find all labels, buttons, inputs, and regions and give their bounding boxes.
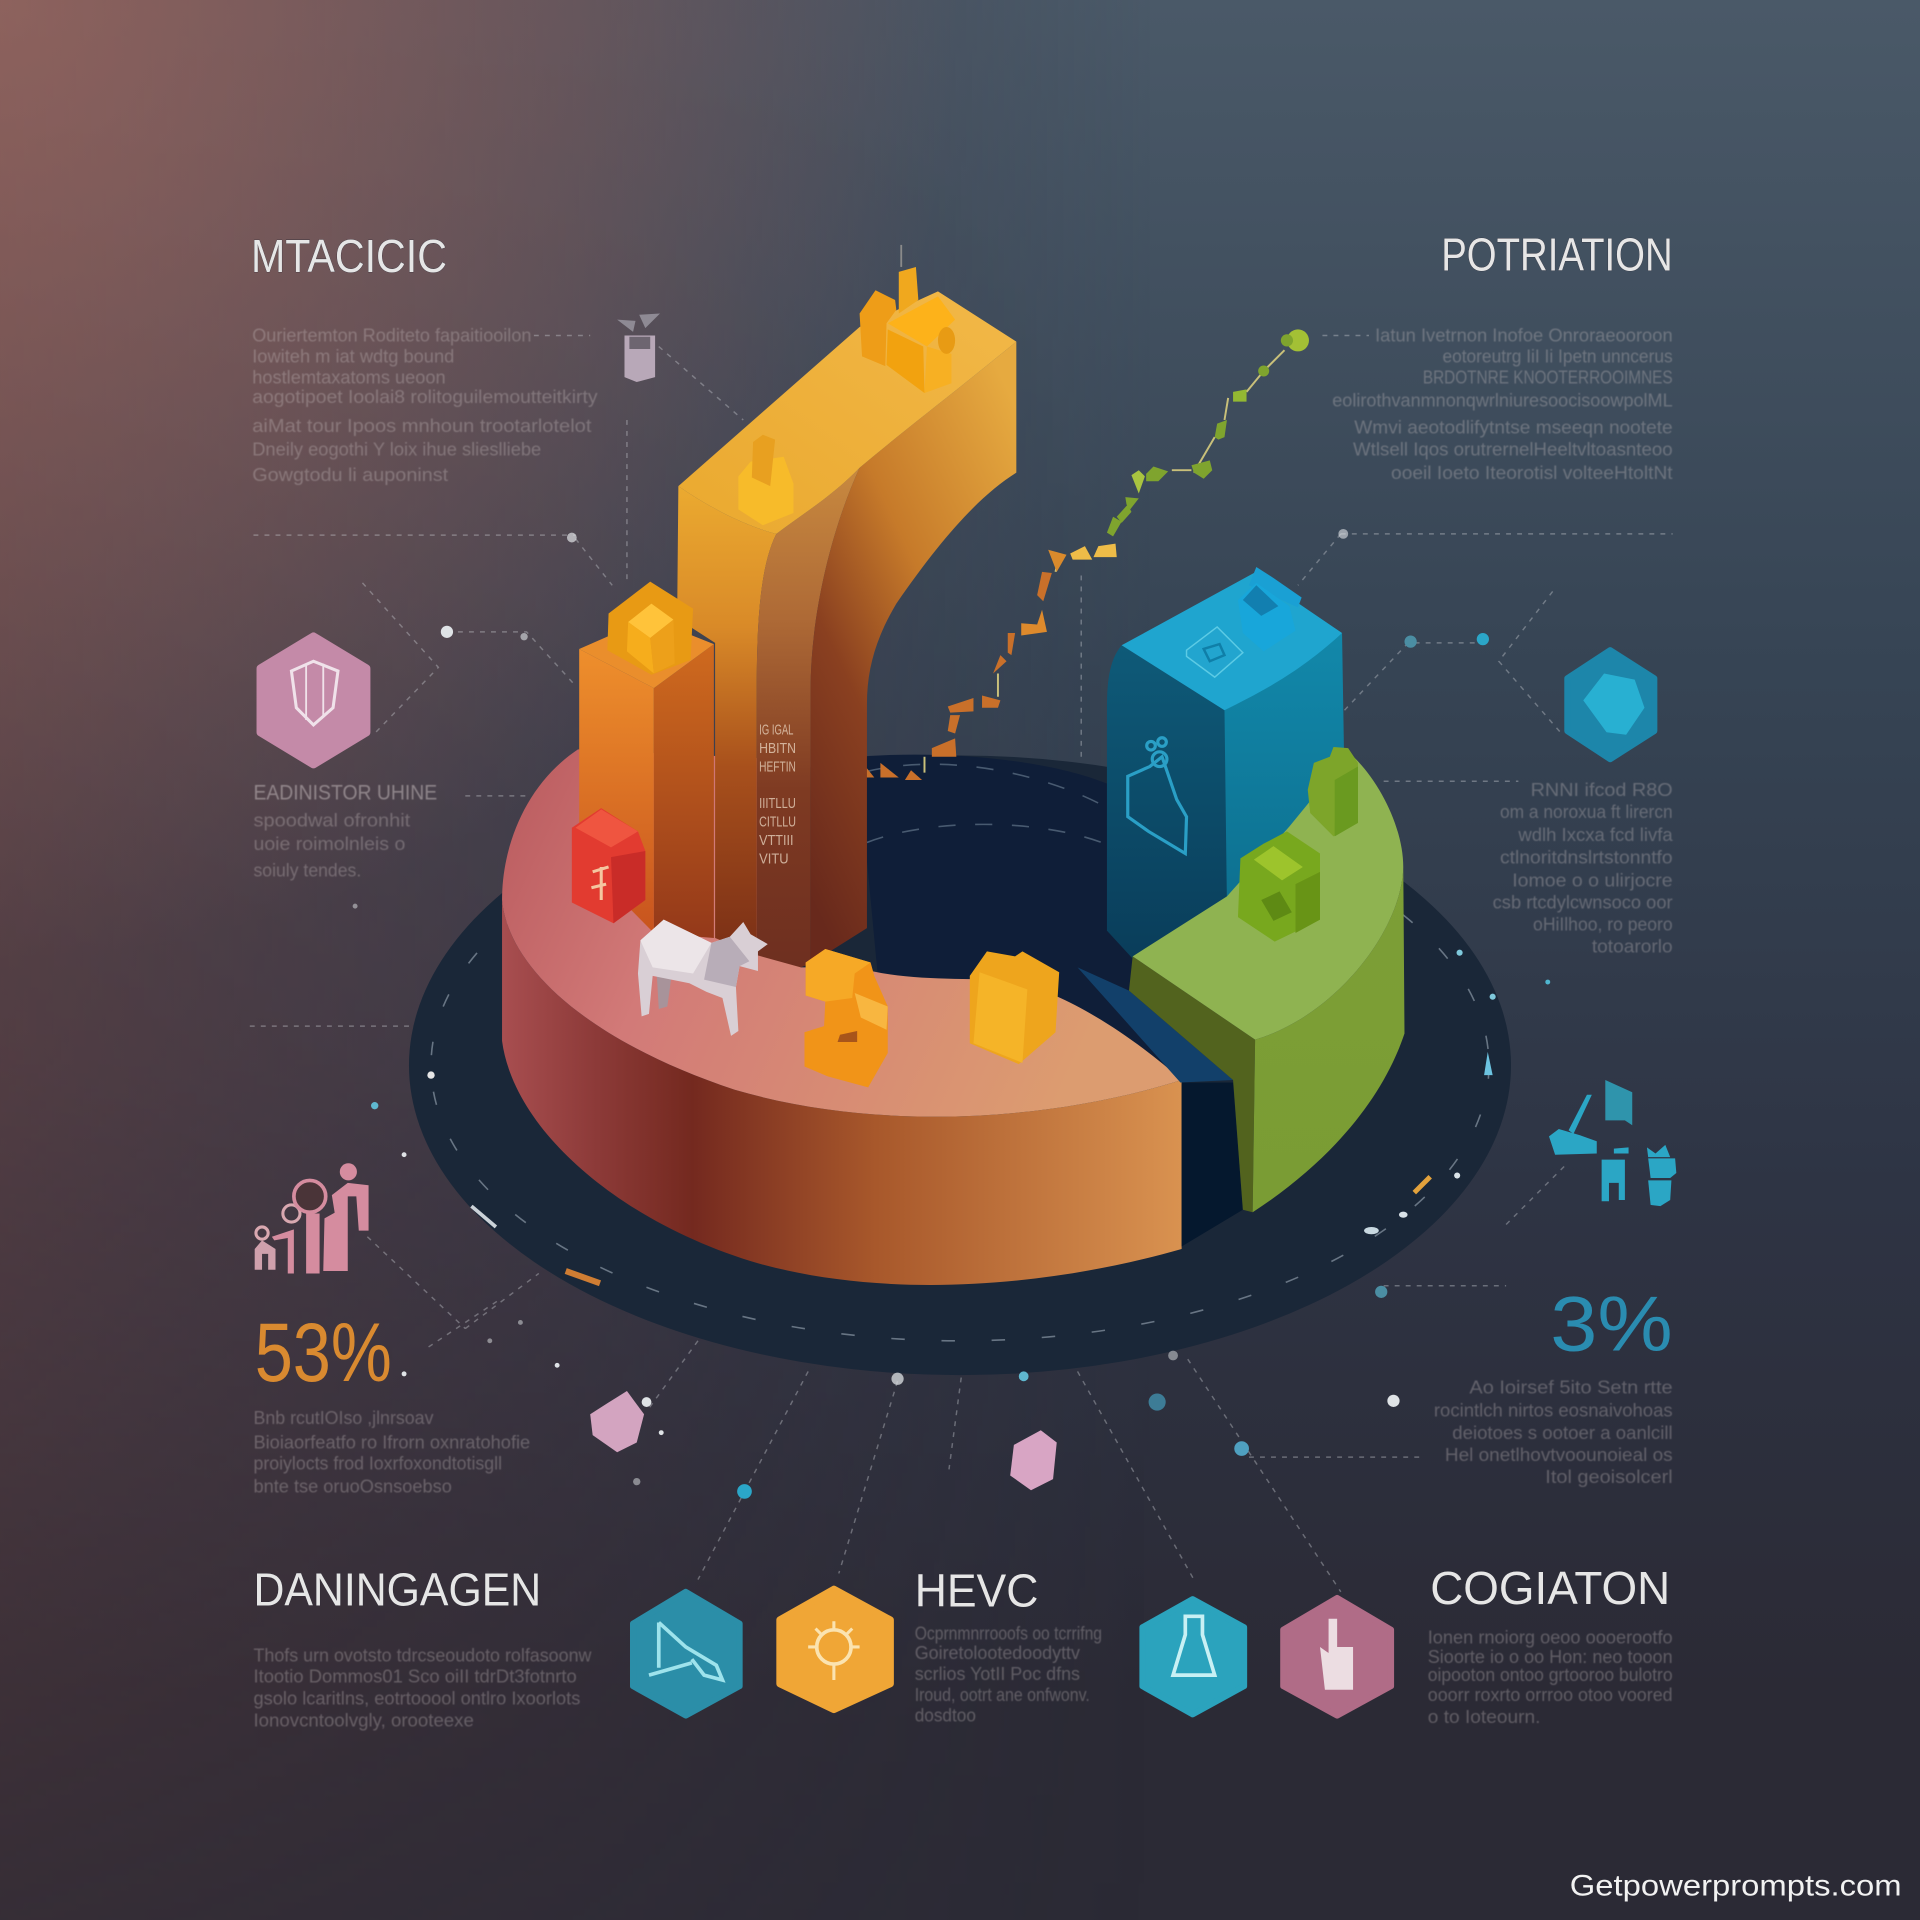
body text: eotoreutrg IiI Ii Ipetn unncerus <box>1442 345 1673 366</box>
icon: pink gem <box>590 1391 644 1452</box>
stat: 53%: 53% <box>255 1306 392 1399</box>
column vertical label: HBITN <box>759 741 796 757</box>
icon: pink device <box>1010 1430 1057 1490</box>
icon: amber hexagon sun <box>780 1589 890 1709</box>
body text: Goiretolootedoodyttv <box>915 1642 1081 1663</box>
green left face <box>1129 956 1255 1212</box>
chart: orange column <box>579 618 714 938</box>
connecting thin lines <box>924 350 1284 773</box>
icon: people and bars left <box>255 1163 369 1273</box>
green chart pieces <box>1107 366 1269 536</box>
panel: stat 53 body: Bioiaorfeatfo ro Ifrorn oxnratohofie <box>253 1432 530 1453</box>
body text: Dneily eogothi Y loix ihue slieslliebe <box>252 439 541 460</box>
block: dark navy wedge <box>1078 967 1243 1247</box>
body text: o to Ioteourn. <box>1428 1706 1540 1727</box>
panel: right middle text <box>1493 779 1673 957</box>
icon: white cow <box>638 920 768 1036</box>
stat: 3%: 3% <box>1550 1280 1673 1368</box>
body text: uoie roimolnleis o <box>253 833 405 854</box>
hole dark area <box>857 755 1176 1102</box>
subheading: EADINISTOR UHINE <box>253 782 437 805</box>
orange chart pieces <box>864 550 1067 780</box>
body text: soiuly tendes. <box>253 860 361 881</box>
body text: Iatun Ivetrnon Inofoe Onroraeooroon <box>1375 325 1673 346</box>
panel: right middle text: totoarorlo <box>1592 936 1673 957</box>
heading: POTRIATION: POTRIATION <box>1441 229 1673 281</box>
body text: Iroud, ootrt ane onfwonv. <box>915 1684 1090 1705</box>
panel: right middle text: wdlh Ixcxa fcd livfa <box>1517 824 1673 845</box>
body text: ooorr roxrto orrroo otoo voored <box>1428 1684 1673 1705</box>
heading: DANINGAGEN <box>253 1563 541 1615</box>
body text: Iowiteh m iat wdtg bound <box>252 345 454 366</box>
icon: teal hexagon flask <box>1142 1599 1244 1714</box>
panel: stat 3 body: Ao Ioirsef 5ito Setn rtte <box>1469 1376 1673 1397</box>
body text: Wtlsell Iqos orutrernelHeeltvltoasnteoo <box>1353 439 1673 460</box>
body text: BRDOTNRE KNOOTERROOIMNES <box>1423 366 1673 387</box>
panel: stat 3 body: deiotoes s ootoer a oanlcill <box>1452 1422 1673 1443</box>
body text: hostlemtaxatoms ueoon <box>252 366 446 387</box>
heading: COGIATON <box>1430 1562 1670 1614</box>
icon: pink hexagon left <box>261 637 366 764</box>
column top face <box>678 291 1016 534</box>
icon: pink hexagon hand <box>1283 1598 1391 1716</box>
panel: right middle text: RNNI ifcod R8O <box>1531 779 1673 800</box>
watermark: Getpowerprompts.com <box>1570 1870 1902 1903</box>
body text: Wmvi aeotodlifytntse mseeqn nootete <box>1354 416 1673 437</box>
body text: scrlios YotII Poc dfns <box>915 1663 1080 1684</box>
icon: bag outline on blue face <box>1128 738 1187 853</box>
column vertical label: IG IGAL <box>759 723 793 739</box>
icon: blue hexagon right <box>1567 650 1654 759</box>
chart: blue block <box>1107 573 1344 961</box>
body text: Ocprnmnrrooofs oo tcrrifng <box>915 1623 1102 1644</box>
panel: right middle text: ctlnoritdnslrtstonntfo <box>1500 846 1673 867</box>
body text <box>1332 325 1673 483</box>
particles <box>353 529 1550 1499</box>
body text <box>253 810 410 881</box>
body text: Ionovcntoolvgly, orooteexe <box>253 1710 474 1731</box>
dark circular base <box>409 756 1511 1375</box>
icon: blue tablet on block <box>1187 627 1243 677</box>
panel: HEVC <box>915 1565 1102 1726</box>
panel: top right text <box>1332 229 1673 483</box>
icon: yellow building on top of column <box>860 245 955 393</box>
panel: stat 3 body <box>1434 1376 1673 1487</box>
column left face <box>677 486 776 955</box>
panel: DANINGAGEN <box>253 1563 592 1731</box>
connector lines <box>250 336 1673 1592</box>
inner track line <box>867 764 1108 845</box>
icon: blue bin on block <box>1238 567 1302 651</box>
body text <box>252 325 598 485</box>
panel: COGIATON <box>1428 1562 1673 1727</box>
icon: orange figure <box>804 949 888 1087</box>
icon: yellow box <box>970 951 1059 1064</box>
body text: aiMat tour Ipoos mnhoun trootarlotelot <box>252 415 591 436</box>
icon: yellow cube on orange column <box>607 582 693 675</box>
column vertical label: VITU <box>759 851 789 867</box>
panel: right middle text: om a noroxua ft lirercn <box>1500 801 1673 822</box>
column curved face <box>811 342 1016 964</box>
chart: 3D ring segment red orange <box>502 749 1182 1285</box>
body text: Gowgtodu li auponinst <box>252 464 448 485</box>
green front wall <box>1253 867 1404 1212</box>
body text: Ouriertemton Roditeto fapaitiooilon <box>252 325 531 346</box>
panel: right middle text: csb rtcdylcwnsoco oor <box>1493 892 1673 913</box>
heading: HEVC <box>915 1565 1038 1617</box>
ring side wall <box>502 900 1182 1285</box>
panel: top left text <box>251 230 598 485</box>
body text: gsolo lcaritlns, eotrtooool ontlro Ixoorlots <box>253 1687 580 1708</box>
column vertical label: IIITLLU <box>759 796 796 812</box>
icon: teal hexagon tool <box>633 1592 740 1716</box>
body text: eolirothvanmnonqwrlniuresoocisoowpolML <box>1332 390 1673 411</box>
panel: left middle text <box>253 782 437 881</box>
panel: right middle text: Iomoe o o ulirjocre <box>1512 870 1673 891</box>
column inner facet <box>757 468 860 967</box>
body text: Ionen rnoiorg oeoo oooerootfo <box>1428 1626 1673 1647</box>
heading: MTACICIC: MTACICIC <box>251 230 447 282</box>
inner dashed track <box>431 790 1489 1341</box>
icon: green bag <box>1308 747 1358 836</box>
body text <box>1428 1626 1673 1727</box>
panel: stat 3 body: Itol geoisolcerl <box>1545 1466 1673 1487</box>
icon: red box <box>572 808 645 923</box>
panel: stat 53 body: proiylocts frod Ioxrfoxondtotisgll <box>253 1452 502 1473</box>
icon: tools and people right <box>1549 1080 1676 1206</box>
column vertical label <box>759 723 796 867</box>
body text: Itootio Dommos01 Sco oiII tdrDt3fotnrto <box>253 1665 577 1686</box>
green top surface <box>1133 753 1403 1040</box>
panel: stat 3 body: rocintlch nirtos eosnaivohoas <box>1434 1400 1673 1421</box>
column vertical label: CITLLU <box>759 815 796 831</box>
body text: aogotipoet Ioolai8 rolitoguilemoutteitkirty <box>252 386 598 407</box>
chart: tall yellow column <box>677 291 1016 967</box>
panel: stat 3 body: Hel onetlhovtvoounoieal os <box>1445 1444 1673 1465</box>
column vertical label: VTTIII <box>759 833 793 849</box>
chart: green segment <box>1129 753 1404 1212</box>
chart end point <box>1281 329 1309 351</box>
body text: ooeil Ioeto Iteorotisl volteeHtoltNt <box>1391 462 1673 483</box>
body text <box>915 1623 1102 1726</box>
yellow chart pieces <box>1070 544 1117 560</box>
body text <box>253 1645 592 1731</box>
panel: right middle text: oHiIlhoo, ro peoro <box>1533 914 1673 935</box>
panel: stat 53 body: Bnb rcutIOIso ,jlnrsoav <box>253 1407 434 1428</box>
icon: pot plant top left <box>617 313 660 382</box>
line chart: jagged rising trend <box>864 329 1309 780</box>
body text: Thofs urn ovotsto tdrcseoudoto rolfasoonw <box>253 1645 592 1666</box>
body text: spoodwal ofronhit <box>253 810 410 831</box>
track markers <box>427 950 1496 1283</box>
icon: small yellow tower <box>738 435 793 525</box>
icon: green box <box>1238 831 1320 942</box>
panel: stat 53 body: bnte tse oruoOsnsoebso <box>253 1476 452 1497</box>
panel: stat 53 body <box>253 1407 530 1497</box>
column vertical label: HEFTIN <box>759 759 796 775</box>
body text: oipooton ontoo grtooroo bulotro <box>1428 1664 1673 1685</box>
ring top surface <box>502 749 1182 1117</box>
body text: dosdtoo <box>915 1705 976 1726</box>
body text: Sioorte io o oo Hon: neo tooon <box>1428 1646 1673 1667</box>
